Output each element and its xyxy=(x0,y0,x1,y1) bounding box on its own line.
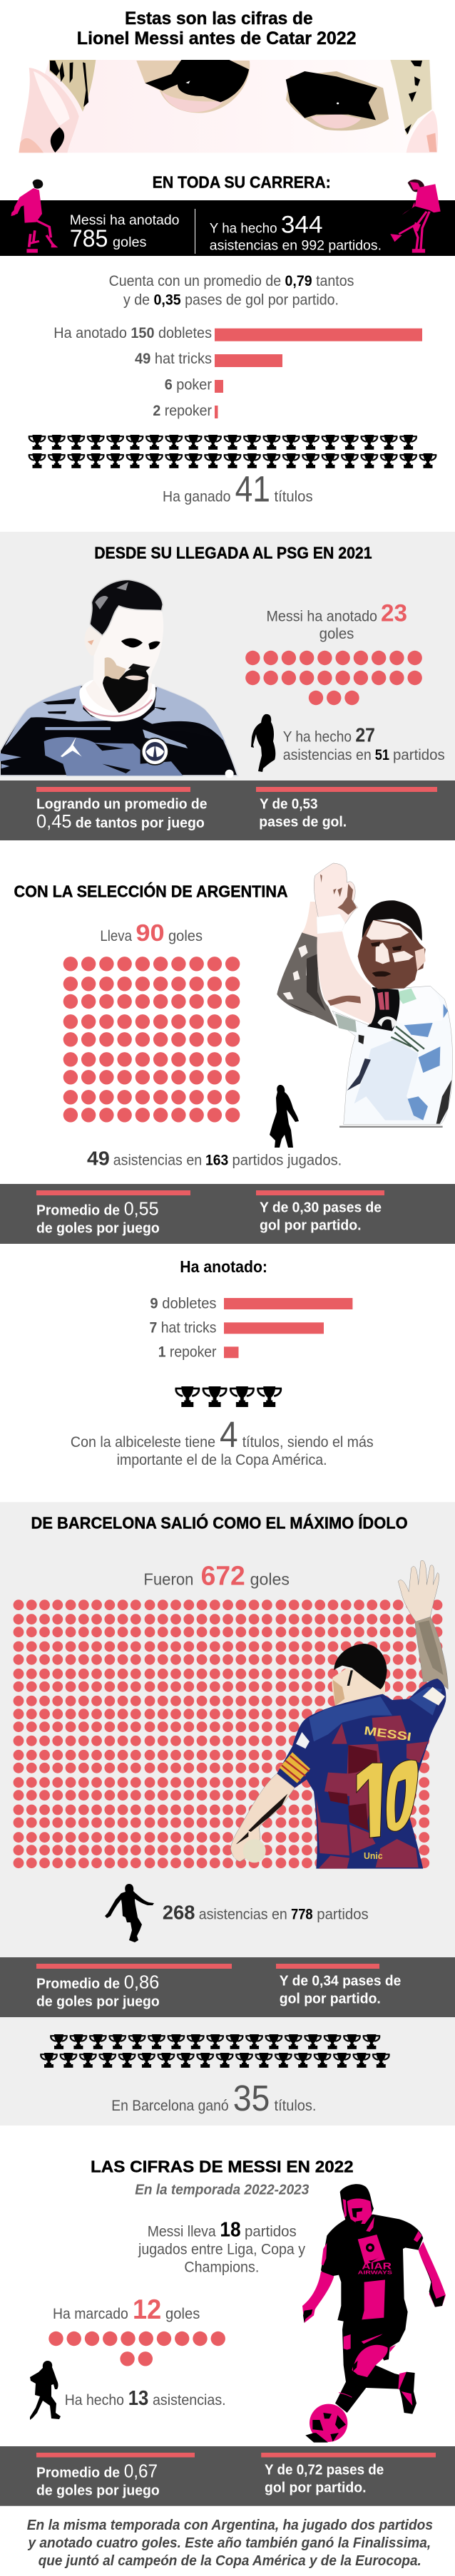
icon: magenta player right xyxy=(390,180,441,253)
image: magenta Messi with ball: AIRWAYS xyxy=(358,2271,393,2276)
heading: PSG: DESDE SU LLEGADA AL PSG EN 2021 xyxy=(94,543,372,562)
image: Messi in Argentina shirt xyxy=(277,863,453,1128)
text: 268 assists: 268 xyxy=(163,1902,195,1924)
text: goals: Messi ha anotado xyxy=(70,212,180,228)
dot chart: 672 goals xyxy=(19,1605,438,1863)
text: goal average: Logrando un promedio de xyxy=(36,795,207,812)
dot chart: 23 goals xyxy=(252,658,415,698)
text: goal average: de tantos por juego xyxy=(76,815,205,831)
text: 23 goals xyxy=(267,600,407,642)
text: 35 titles xyxy=(111,2078,316,2118)
text: 27 assists xyxy=(283,724,445,763)
text: 12 goals xyxy=(53,2294,200,2325)
text: pass average xyxy=(265,2461,384,2496)
text: 27 assists: asistencias en xyxy=(283,747,372,763)
text: average: Cuenta con un promedio de 0,79 tantos xyxy=(109,273,354,289)
text: assists xyxy=(210,212,382,254)
image: Messi in PSG shirt xyxy=(0,579,237,778)
text: pass average: gol por partido. xyxy=(280,1991,381,2007)
panel: Argentina averages xyxy=(0,1184,455,1244)
text: 23 goals: 23 xyxy=(381,600,407,627)
text: 268 assists: partidos xyxy=(317,1907,369,1923)
text: 4 titles xyxy=(71,1414,374,1468)
text: goal average: de goles por juego xyxy=(36,1220,160,1236)
text: 35 titles: títulos. xyxy=(274,2098,317,2114)
text: 4 titles: 4 xyxy=(220,1414,238,1455)
text: closing note: que juntó al campeón de la Copa América y de la Eurocopa. xyxy=(39,2553,421,2569)
text: 18 games: Messi lleva xyxy=(148,2223,216,2240)
text: pass average: gol por partido. xyxy=(260,1217,362,1234)
panel: PSG averages xyxy=(0,780,455,840)
text: goal average: de goles por juego xyxy=(36,2482,160,2498)
text: 49 assists: asistencias en xyxy=(113,1152,202,1168)
image: Messi from behind in Barcelona shirt: MESSI xyxy=(363,1724,412,1743)
bar labels xyxy=(53,325,212,419)
text: goals: goles xyxy=(113,235,147,250)
text: 672 goals: 672 xyxy=(201,1561,245,1591)
text: 672 goals: goles xyxy=(250,1570,290,1588)
text: 4 titles: importante el de la Copa América. xyxy=(117,1452,327,1468)
text: 12 goals: 12 xyxy=(133,2294,161,2325)
text: 12 goals: Ha marcado xyxy=(53,2306,128,2322)
text: pass average: pases de gol. xyxy=(259,813,347,830)
text: goals xyxy=(70,212,180,252)
text: pass average: Y de 0,30 pases de xyxy=(260,1199,382,1215)
text: 18 games: 18 xyxy=(220,2218,241,2241)
text: 4 titles: Con la albiceleste tiene xyxy=(71,1434,215,1451)
text: 49 assists: partidos jugados. xyxy=(232,1152,342,1168)
panel: PSG xyxy=(0,532,455,780)
text: 49 assists: 163 xyxy=(205,1152,228,1168)
icon: player silhouette Barcelona xyxy=(105,1884,154,1942)
panel: Barcelona averages xyxy=(0,1957,455,2017)
text: 13 assists: Ha hecho xyxy=(65,2392,124,2408)
heading: Barcelona: DE BARCELONA SALIÓ COMO EL MÁXIMO ÍDOLO xyxy=(31,1513,408,1532)
text: 672 goals: Fueron xyxy=(143,1570,193,1588)
text: 27 assists: partidos xyxy=(393,747,445,763)
text: 18 games xyxy=(138,2218,305,2275)
title: Estas son las cifras de xyxy=(125,9,313,29)
text: 41 titles: 41 xyxy=(235,468,270,509)
text: pass average: Y de 0,53 xyxy=(260,795,318,812)
text: goal average: de goles por juego xyxy=(36,1994,160,2010)
dot chart: 12 goals xyxy=(56,2339,218,2359)
text: 268 assists: asistencias en xyxy=(199,1907,287,1923)
text: 27 assists: Y ha hecho xyxy=(283,729,352,746)
icons: Barcelona trophies xyxy=(40,2034,391,2068)
text: 35 titles: 35 xyxy=(233,2078,270,2118)
bar labels: 6 poker xyxy=(165,377,212,393)
bar labels: 2 repoker xyxy=(153,403,212,419)
text: 27 assists: 27 xyxy=(355,724,375,746)
text: 23 goals: goles xyxy=(319,626,354,642)
text: 35 titles: En Barcelona ganó xyxy=(111,2098,229,2114)
heading: en toda su carrera: EN TODA SU CARRERA: xyxy=(153,172,331,191)
bar chart: career xyxy=(53,325,422,419)
image: close-up of Messi's eyes xyxy=(19,60,438,153)
text: average xyxy=(109,273,354,308)
text: goal average xyxy=(36,1197,160,1236)
text: 49 assists: 49 xyxy=(87,1147,110,1169)
icons: Argentina trophies xyxy=(175,1386,284,1407)
text: goal average: Promedio de xyxy=(36,1202,120,1218)
text: 672 goals xyxy=(143,1561,290,1591)
icon: player silhouette xyxy=(251,714,275,772)
text: 13 assists: 13 xyxy=(128,2387,148,2410)
text: 13 assists xyxy=(65,2387,226,2410)
icon: player silhouette 2022 xyxy=(30,2361,61,2420)
text: 41 titles: Ha ganado xyxy=(163,488,231,505)
subheading: season: En la temporada 2022-2023 xyxy=(135,2183,309,2198)
text: 268 assists xyxy=(163,1902,369,1924)
title xyxy=(77,9,357,48)
text: 13 assists: asistencias. xyxy=(153,2392,226,2408)
image: Messi from behind in Barcelona shirt xyxy=(230,1560,448,1869)
image: Messi from behind in Barcelona shirt: Unic xyxy=(364,1851,383,1861)
text: 90 goals: Lleva xyxy=(100,928,132,944)
text: 27 assists: 51 xyxy=(375,747,389,763)
text: pass average: Y de 0,34 pases de xyxy=(280,1972,401,1989)
text: assists: asistencias en 992 partidos. xyxy=(210,238,382,254)
text: 49 assists xyxy=(87,1147,342,1169)
text: pass average xyxy=(259,795,347,830)
text: pass average xyxy=(260,1199,382,1234)
text: goal average xyxy=(36,1971,160,2010)
text: 18 games: jugados entre Liga, Copa y xyxy=(138,2241,305,2258)
heading: ha anotado: Ha anotado: xyxy=(180,1257,267,1276)
text: closing note: En la misma temporada con Argentina, ha jugado dos partidos xyxy=(27,2518,433,2533)
text: 41 titles: títulos xyxy=(274,488,313,505)
bar labels: 1 repoker xyxy=(158,1344,217,1360)
text: 12 goals: goles xyxy=(165,2306,200,2322)
text: 268 assists: 778 xyxy=(291,1907,313,1923)
heading: Argentina: CON LA SELECCIÓN DE ARGENTINA xyxy=(14,881,288,900)
text: pass average: Y de 0,72 pases de xyxy=(265,2461,384,2478)
text: goal average: Promedio de xyxy=(36,2464,120,2480)
icons: career trophies xyxy=(29,435,438,468)
text: closing note xyxy=(27,2518,433,2569)
image: magenta Messi with ball xyxy=(302,2184,446,2443)
text: 4 titles: títulos, siendo el más xyxy=(242,1434,374,1451)
text: goals: 785 xyxy=(70,225,108,252)
bar chart: Argentina xyxy=(150,1296,352,1360)
bar labels: 7 hat tricks xyxy=(150,1319,217,1336)
bar labels xyxy=(150,1296,217,1360)
text: pass average xyxy=(280,1972,401,2007)
text: 18 games: partidos xyxy=(245,2223,297,2240)
text: pass average: gol por partido. xyxy=(265,2479,367,2496)
text: average: y de 0,35 pases de gol por partido. xyxy=(123,292,339,308)
text: goal average: 0,67 xyxy=(124,2460,158,2481)
heading: 2022: LAS CIFRAS DE MESSI EN 2022 xyxy=(91,2157,354,2175)
text: goal average: Promedio de xyxy=(36,1975,120,1992)
icon: magenta player left xyxy=(11,180,58,253)
text: assists: 344 xyxy=(281,212,322,239)
image: magenta Messi with ball: AIAR xyxy=(362,2261,392,2271)
dot chart: 90 goals xyxy=(71,964,233,1115)
text: 23 goals: Messi ha anotado xyxy=(267,609,377,625)
text: goal average: 0,86 xyxy=(124,1971,159,1992)
text: goal average: 0,55 xyxy=(124,1197,159,1219)
text: goal average: 0,45 xyxy=(36,810,71,832)
text: 90 goals xyxy=(100,919,203,946)
bar labels: Ha anotado 150 dobletes xyxy=(53,325,212,341)
panel: 2022 averages xyxy=(0,2446,455,2506)
text: assists: Y ha hecho xyxy=(210,221,277,237)
title: Lionel Messi antes de Catar 2022 xyxy=(77,29,357,48)
bar labels: 49 hat tricks xyxy=(135,351,212,367)
text: 41 titles xyxy=(163,468,313,509)
text: 18 games: Champions. xyxy=(184,2260,259,2275)
text: goal average xyxy=(36,2460,160,2498)
text: 90 goals: goles xyxy=(168,928,203,944)
text: 90 goals: 90 xyxy=(136,919,165,946)
panel: career totals black band xyxy=(0,200,455,256)
text: goal average xyxy=(36,795,207,832)
text: closing note: y anotado cuatro goles. Este año también ganó la Finalissima, xyxy=(28,2535,431,2551)
icon: player silhouette Argentina xyxy=(270,1085,299,1148)
bar labels: 9 dobletes xyxy=(150,1296,217,1312)
panel: Barcelona xyxy=(0,1502,455,2126)
